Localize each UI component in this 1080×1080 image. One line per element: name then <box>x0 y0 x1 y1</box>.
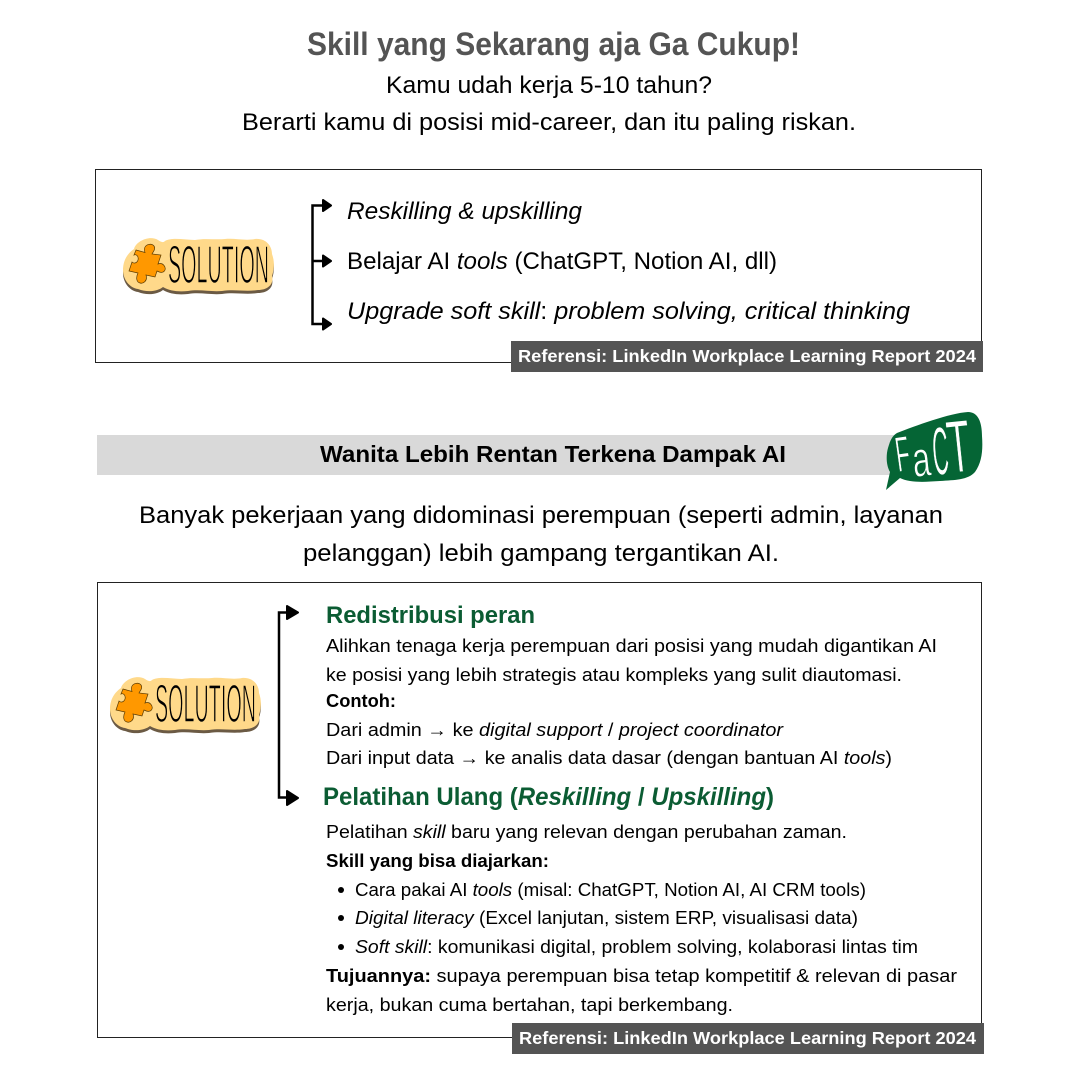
solution list: Upgrade soft skill : problem solving, critical thinking <box>347 298 911 325</box>
arrow bracket <box>312 200 331 330</box>
bullet list <box>338 880 918 957</box>
fact lettering: a <box>909 430 933 488</box>
title: Skill yang Sekarang aja Ga Cukup! <box>307 26 800 62</box>
arrow bracket <box>279 606 298 805</box>
bullet list: Soft skill : komunikasi digital, problem solving, kolaborasi lintas tim <box>355 937 918 957</box>
goal statement: Tujuannya: supaya perempuan bisa tetap kompetitif & relevan di pasar <box>326 966 957 986</box>
reference tag <box>511 341 983 372</box>
block: pelatihan ulang <box>323 783 957 1015</box>
fact lettering: F <box>892 425 913 483</box>
reference tag: Referensi: LinkedIn Workplace Learning Report 2024 <box>518 346 976 366</box>
block: redistribusi peran: Dari input data → ke analis data dasar (dengan bantuan AI tools) <box>326 748 892 768</box>
block: redistribusi peran: Alihkan tenaga kerja perempuan dari posisi yang mudah digantikan AI <box>326 636 937 656</box>
section heading bar <box>97 435 907 475</box>
icon: solution sticker <box>123 235 274 295</box>
icon: solution sticker <box>110 674 261 734</box>
section heading bar: Wanita Lebih Rentan Terkena Dampak AI <box>320 441 786 467</box>
block: pelatihan ulang: Skill yang bisa diajarkan: <box>326 851 549 871</box>
icon: puzzle piece <box>116 683 152 722</box>
panel: solution two: SOLUTION <box>155 674 256 734</box>
solution list: Reskilling & upskilling <box>347 198 583 225</box>
reference tag: Referensi: LinkedIn Workplace Learning Report 2024 <box>519 1028 976 1048</box>
bullet list: Digital literacy (Excel lanjutan, sistem ERP, visualisasi data) <box>355 908 858 928</box>
section description: Banyak pekerjaan yang didominasi perempuan (seperti admin, layanan <box>139 502 943 529</box>
block: redistribusi peran: Redistribusi peran <box>326 602 535 629</box>
goal statement: kerja, bukan cuma bertahan, tapi berkembang. <box>326 995 733 1015</box>
block: redistribusi peran <box>326 602 937 768</box>
bullet list: Cara pakai AI tools (misal: ChatGPT, Notion AI, AI CRM tools) <box>355 880 866 900</box>
block: redistribusi peran: ke posisi yang lebih strategis atau kompleks yang sulit diautomasi. <box>326 665 902 685</box>
fact lettering: T <box>943 404 975 489</box>
intro text: Berarti kamu di posisi mid-career, dan itu paling riskan. <box>242 109 856 136</box>
intro text <box>242 72 856 136</box>
intro text: Kamu udah kerja 5-10 tahun? <box>386 72 712 99</box>
reference tag <box>512 1023 984 1054</box>
panel: solution one: SOLUTION <box>168 235 269 295</box>
panel: solution one <box>96 170 983 372</box>
goal statement <box>326 966 957 1015</box>
block: redistribusi peran: Contoh: <box>326 691 396 711</box>
section description: pelanggan) lebih gampang tergantikan AI. <box>303 540 779 567</box>
solution list: Belajar AI tools (ChatGPT, Notion AI, dll) <box>347 248 777 275</box>
block: pelatihan ulang: Pelatihan Ulang (Reskilling / Upskilling) <box>323 783 774 811</box>
icon: puzzle piece <box>129 244 165 283</box>
block: pelatihan ulang: Pelatihan skill baru yang relevan dengan perubahan zaman. <box>326 822 847 842</box>
icon: fact speech bubble <box>886 404 982 490</box>
fact lettering: C <box>930 413 951 490</box>
panel: solution two <box>98 582 984 1054</box>
solution list <box>347 198 911 325</box>
section description <box>139 502 943 567</box>
block: redistribusi peran: Dari admin → ke digital support / project coordinator <box>326 720 784 740</box>
fact lettering <box>892 404 975 490</box>
